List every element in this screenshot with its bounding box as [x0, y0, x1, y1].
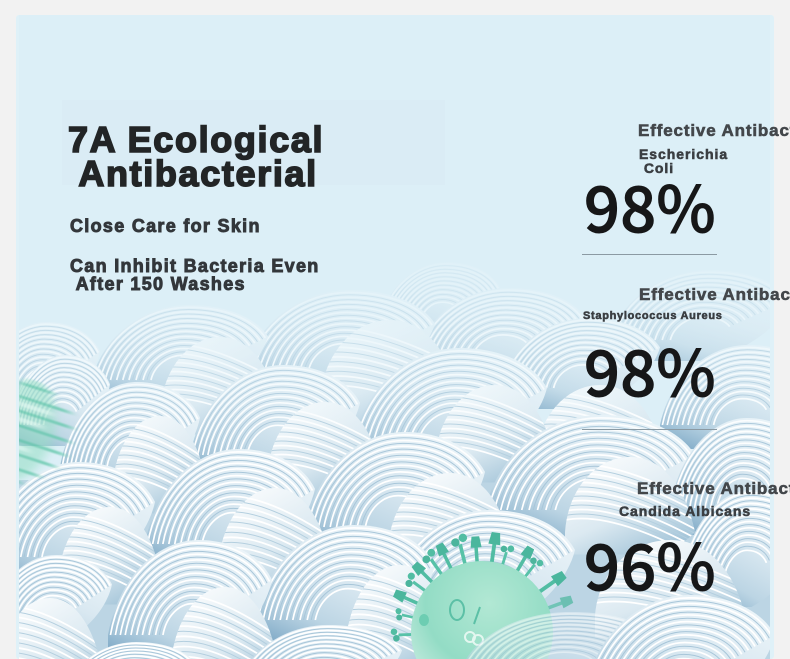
stat 3 bacteria name: Candida Albicans: [619, 503, 751, 519]
stat 3 value: 96%: [584, 518, 716, 609]
stat 1 value: 98%: [584, 160, 716, 251]
subtitle: close care: Close Care for Skin: [70, 216, 261, 236]
stat 1 bacteria name: Escherichia Coli: [639, 146, 728, 176]
stat 2 bacteria name: Staphylococcus Aureus: [583, 310, 723, 322]
icon: blurred virus left: [19, 378, 76, 486]
fabric dome over virus base: [466, 612, 626, 659]
title: 7A Ecological Antibacterial: [68, 119, 324, 194]
icon: virus bottom: [391, 532, 775, 659]
text: inhibit bacteria: Can Inhibit Bacteria Even After 150 Washes: [70, 256, 320, 294]
stat 2 value: 98%: [584, 324, 716, 415]
scallop texture: [19, 266, 770, 659]
